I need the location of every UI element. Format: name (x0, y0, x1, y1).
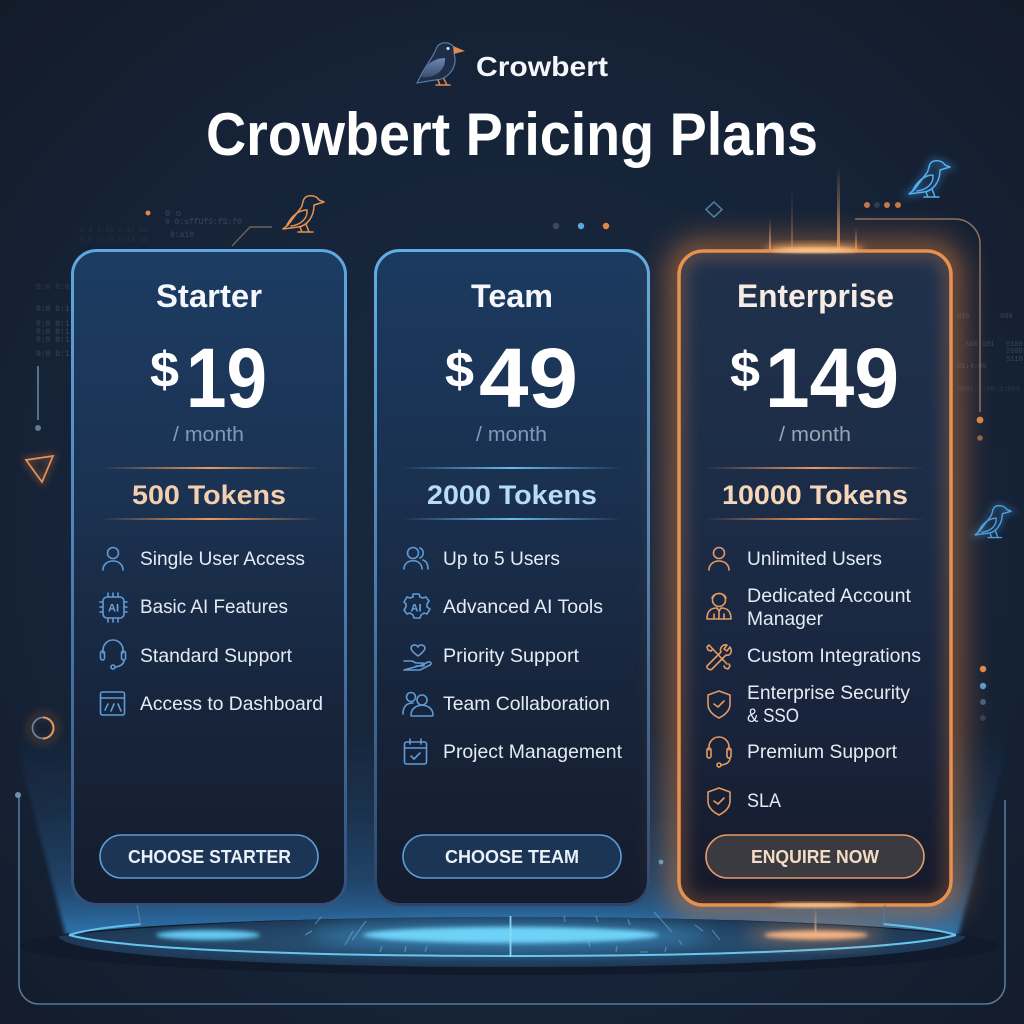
plan name: starter: Starter (156, 278, 262, 314)
icon: orange triangle (26, 456, 53, 482)
feature: enterprise security: Enterprise Security (747, 682, 910, 704)
decorative data text, left: 0:0 0:1 (36, 350, 70, 359)
feature: premium support (707, 737, 898, 767)
icon: ring (29, 714, 57, 742)
logo (417, 43, 608, 85)
decorative data text, right: 0100 (1006, 341, 1023, 349)
decorative data text, left: 0:0 0:10 0:10 10 (80, 237, 147, 245)
feature: dedicated account manager: Dedicated Account (747, 585, 912, 607)
platform ring (69, 924, 956, 956)
decorative data text, left: 0:a10 (170, 231, 194, 240)
button: choose starter (100, 835, 318, 878)
token allowance: starter: 500 Tokens (132, 480, 286, 510)
price: starter: $ (150, 342, 179, 398)
platform ticks (305, 912, 720, 952)
price: enterprise: $ (730, 342, 760, 398)
glow: starter spot (156, 930, 260, 940)
token allowance: enterprise: 10000 Tokens (722, 480, 908, 510)
panel: team (376, 250, 648, 904)
icon: blue crow right (975, 506, 1011, 538)
top dots (553, 223, 609, 229)
decorative data text, left: 0:0 0:1 (36, 320, 70, 329)
feature: basic ai (100, 593, 288, 622)
decorative data text, right: Sb0:101 (965, 341, 994, 349)
left circuit ornaments (35, 210, 272, 431)
icon: diamond (706, 202, 722, 217)
enterprise glow (672, 165, 958, 912)
logo wordmark: Crowbert (476, 51, 608, 82)
feature: sla: SLA (747, 790, 781, 812)
decorative data text, left: 0 o (165, 209, 181, 219)
decorative data text, left: 0:0 0:0 (36, 283, 70, 292)
icon: crow logo (417, 43, 465, 85)
feature: dashboard: Access to Dashboard (140, 693, 323, 715)
feature: standard support (100, 640, 293, 669)
price: team: $ (445, 342, 474, 398)
plan name: enterprise: Enterprise (737, 278, 894, 314)
panel: enterprise (679, 248, 951, 907)
feature: dedicated account manager: Manager (747, 608, 823, 630)
price: starter (150, 331, 267, 425)
panel: starter (72, 250, 346, 904)
glow: team spot (363, 927, 659, 943)
decorative data text, left: 0:0 0:10 0:10 10 (80, 227, 147, 235)
decorative data text, right: 2600 (1006, 348, 1023, 356)
button: choose team: CHOOSE TEAM (445, 846, 579, 867)
token allowance: team: 2000 Tokens (427, 480, 597, 510)
decorative data text, left: 0 0:sffUfS:fS:f0 (165, 218, 242, 227)
feature: standard support: Standard Support (140, 645, 293, 667)
price: enterprise: 149 (765, 331, 899, 425)
decorative data text, right: 01:4:06 (957, 363, 986, 371)
decorative data text, left: 0:0 0:1 (36, 328, 70, 337)
feature: advanced ai: AI (410, 602, 422, 614)
button: enquire now: ENQUIRE NOW (751, 846, 880, 867)
icon: orange crow (283, 196, 324, 232)
feature: up to 5 users: Up to 5 Users (443, 548, 560, 570)
decorative data text, right: 0000:1:00:1:001 (957, 386, 1020, 394)
feature: enterprise security (708, 682, 910, 727)
decorative data text, right: 5110 (1006, 356, 1023, 364)
feature: single user access: Single User Access (140, 548, 305, 570)
feature: team collaboration: Team Collaboration (443, 693, 610, 715)
glow: enterprise spot (746, 908, 886, 947)
decorative data text, left: 0:0 0:1 (36, 336, 70, 345)
feature: custom integrations: Custom Integrations (747, 645, 921, 667)
platform (20, 905, 1000, 975)
right side dots (15, 666, 986, 864)
billing period: starter: / month (173, 423, 244, 446)
decorative data text, right: 600 (1000, 313, 1013, 321)
feature: priority support: Priority Support (443, 645, 580, 667)
feature: unlimited users: Unlimited Users (747, 548, 882, 570)
connector lines (137, 905, 885, 925)
button: enquire now (706, 835, 924, 878)
feature: basic ai: AI (108, 602, 119, 614)
frame: lower circuit outline (19, 795, 1005, 1004)
feature: sla (708, 788, 781, 815)
decorative data text, right: 010 (957, 313, 970, 321)
feature: premium support: Premium Support (747, 741, 898, 763)
feature: project management: Project Management (443, 741, 623, 763)
center axis line (510, 916, 512, 957)
feature: enterprise security: & SSO (747, 705, 799, 727)
right circuit line (855, 219, 983, 441)
feature: dedicated account manager (707, 585, 912, 630)
billing period: enterprise: / month (779, 423, 851, 446)
plan name: team: Team (471, 278, 553, 314)
feature: advanced ai: Advanced AI Tools (443, 596, 603, 618)
billing period: team: / month (476, 423, 547, 446)
decorative data text, left: 0:0 0:1 (36, 305, 70, 314)
feature: basic ai: Basic AI Features (140, 596, 288, 618)
decorative data text, left (36, 209, 242, 359)
icon: blue crow top right (909, 161, 950, 197)
decorative data text, right (957, 313, 1023, 394)
light beams behind cards (20, 730, 1004, 936)
button: choose team (403, 835, 621, 878)
title: Crowbert Pricing Plans (206, 101, 818, 168)
button: choose starter: CHOOSE STARTER (128, 846, 291, 867)
price: team: 49 (479, 331, 578, 425)
price: starter: 19 (186, 331, 267, 425)
right dots above circuit line (864, 202, 901, 208)
feature: priority support (404, 645, 580, 670)
